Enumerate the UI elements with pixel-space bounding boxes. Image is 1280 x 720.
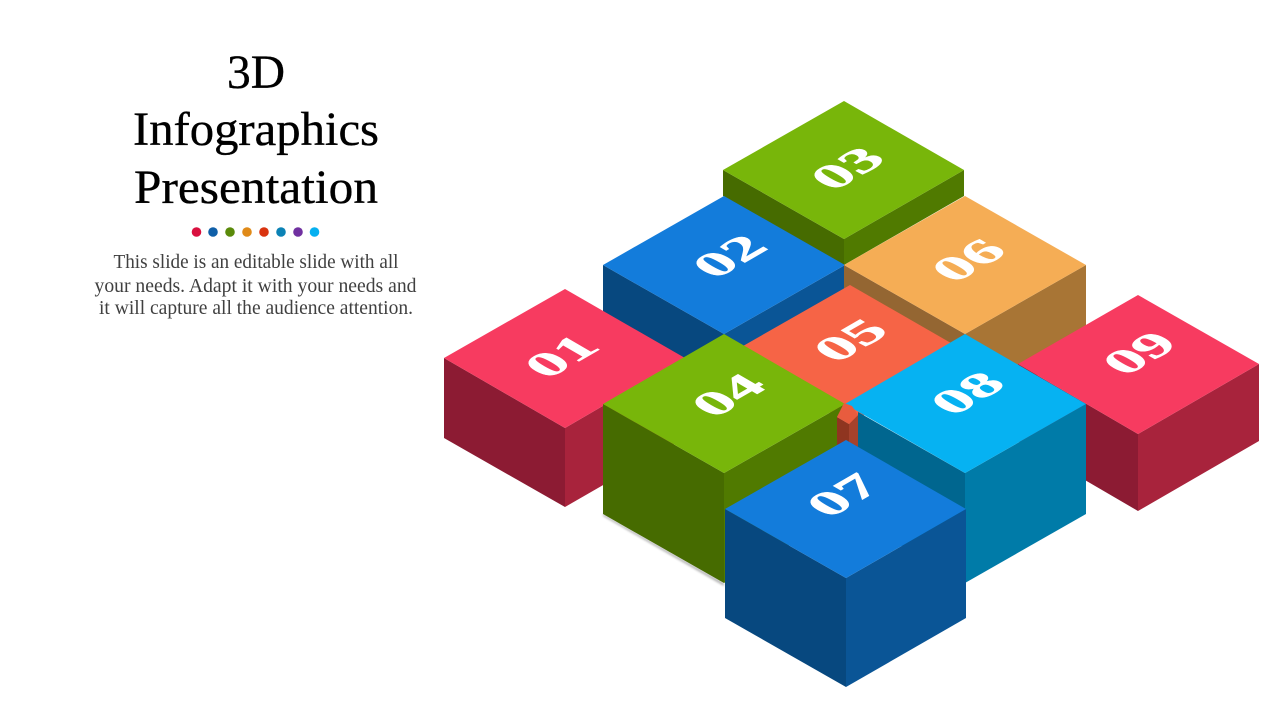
block 07: 07 — [794, 467, 894, 524]
block 05 — [729, 285, 970, 424]
description text: it will capture all the audience attention. — [99, 298, 413, 319]
title: Infographics — [133, 103, 379, 156]
block 03 — [723, 101, 964, 265]
block 02 — [603, 196, 845, 420]
block 05: 05 — [801, 312, 901, 369]
block 04 — [603, 334, 845, 583]
description text: your needs. Adapt it with your needs and — [94, 276, 417, 297]
block 01 — [444, 289, 685, 507]
title: Presentation — [134, 161, 378, 214]
block 04: 04 — [679, 367, 779, 424]
block 03: 03 — [798, 140, 898, 197]
block 09 — [1018, 295, 1259, 511]
block 06 — [844, 196, 1086, 420]
block 08 — [845, 334, 1086, 583]
block 01: 01 — [512, 328, 612, 385]
block 06: 06 — [919, 232, 1019, 289]
colored dots row — [192, 227, 319, 237]
title: 3D — [227, 46, 285, 99]
block 02: 02 — [680, 228, 780, 285]
block 07 — [725, 440, 966, 687]
shadow under block 04 — [603, 514, 724, 586]
block 08: 08 — [918, 365, 1018, 422]
block 05 corner post — [837, 403, 858, 452]
description text — [94, 252, 417, 319]
title — [133, 46, 379, 214]
description text: This slide is an editable slide with all — [114, 252, 399, 273]
block 09: 09 — [1090, 325, 1190, 382]
